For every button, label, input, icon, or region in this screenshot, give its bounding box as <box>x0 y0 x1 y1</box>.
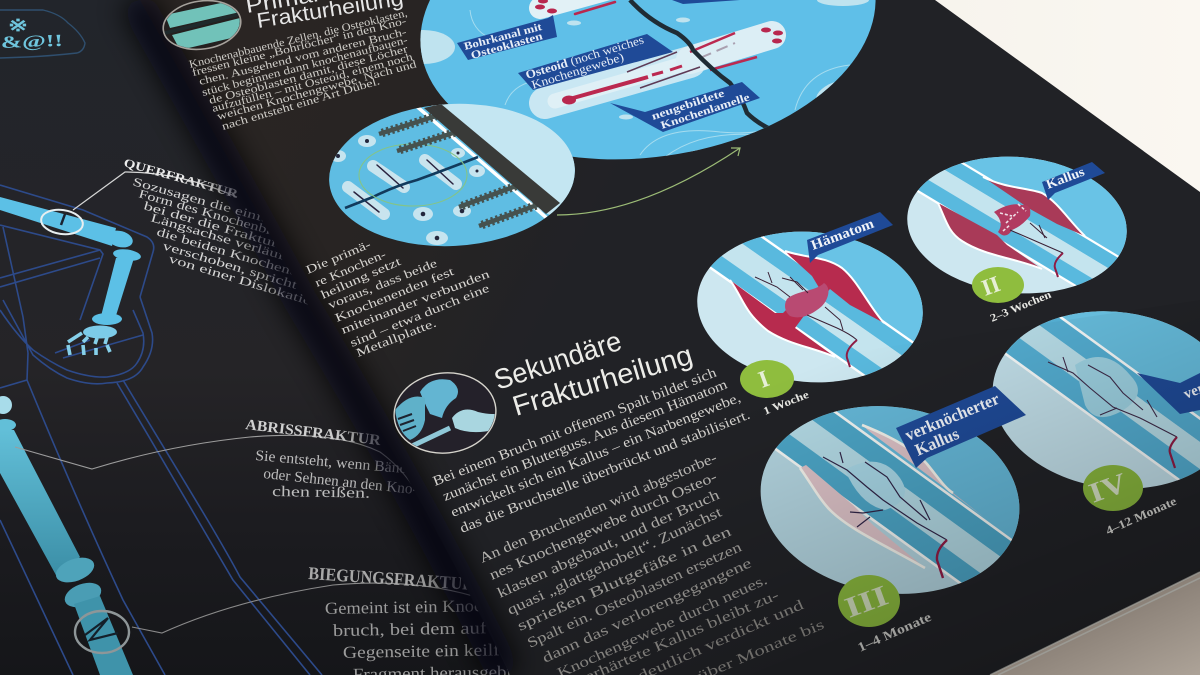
label: Kallus: Kallus <box>1044 164 1086 192</box>
badge: I: I <box>755 366 773 394</box>
callout: Querfraktur: Sozusagen die einfachste <box>131 174 306 236</box>
text block: plate caption <box>304 237 491 360</box>
callout: Abrissfraktur: oder Sehnen an den Kno- <box>263 466 418 498</box>
body outlines <box>0 185 322 675</box>
text block: second paragraph: sprießen Blutgefäße in den <box>515 523 735 635</box>
rings and dots <box>330 135 485 245</box>
badge: III: III <box>840 579 893 625</box>
text block: plate caption: re Knochen- <box>313 247 388 290</box>
text block: primary healing: Knochenabbauende Zellen, die Osteoklasten, <box>188 7 409 71</box>
figure: skeleton illustration <box>0 10 322 675</box>
label: Osteoid: Knochengewebe) <box>530 50 625 92</box>
fracture crack <box>628 0 769 128</box>
diagram: stage III <box>760 386 1026 652</box>
label: neugebildete Knochenlamelle <box>610 82 760 132</box>
text block: second paragraph: klasten abgebaut, und der Bruch <box>495 487 723 602</box>
callus red shapes <box>988 180 1083 236</box>
callout: Abrissfraktur: chen reißen. <box>272 484 370 502</box>
callout: Biegungsfraktur: Gegenseite ein keilförmiges <box>343 639 563 662</box>
text block: primary healing: chen. Ausgehend vom anderen Bruch- <box>198 26 408 88</box>
caption: 1 Woche: 1 Woche <box>762 389 811 418</box>
text block: primary healing: fressen kleine „Bohrlöcher“ in den Kno- <box>191 15 408 79</box>
label: verknöcherter Kallus: verknöcherter <box>902 389 1002 445</box>
background: table shadow area <box>980 565 1200 675</box>
heading: Sekundäre Frakturheilung: Sekundäre <box>490 325 625 396</box>
illustration: bone remodelling circle <box>420 0 876 160</box>
text block: intro paragraph: zunächst ein Bluterguss. Aus diesem Hämatom <box>441 377 730 505</box>
fracture mark: wedge <box>75 611 129 653</box>
red lamella lines <box>566 33 757 100</box>
label: verknöcherter Kallus: Kallus <box>912 424 962 460</box>
page edge stack <box>990 572 1200 675</box>
green zoom circle <box>359 144 467 206</box>
callout: Querfraktur: verschoben, spricht man <box>161 238 333 302</box>
badge: I <box>740 360 794 398</box>
text block: primary healing: nach entsteht eine Art Dübel. <box>220 75 382 133</box>
diagram: stage II Kallus <box>907 156 1127 322</box>
badge: IV: IV <box>1085 467 1131 510</box>
text block: intro paragraph: Bei einem Bruch mit offenem Spalt bildet sich <box>431 366 719 490</box>
label: Bohrkanal: Osteoklasten <box>470 30 544 62</box>
hematoma red shapes <box>785 251 884 323</box>
label: neugebildete Knochenlamelle: neugebildete <box>650 87 726 123</box>
badge: II: II <box>978 271 1004 301</box>
text block: second paragraph: Spalt ein. Osteoblasten ersetzen <box>525 539 745 652</box>
text block: primary healing: stück beginnen dann knochenaufbauen- <box>201 34 409 99</box>
callus fragments <box>994 204 1030 236</box>
text block: primary healing <box>188 7 418 133</box>
bone bridge patch <box>845 462 905 510</box>
callout: Querfraktur <box>73 155 333 312</box>
vessels <box>1048 357 1177 468</box>
callout: Querfraktur: bei der die Frakturlinie <box>142 198 311 259</box>
badge: IV <box>1083 465 1143 511</box>
callout: Abrissfraktur: Sie entsteht, wenn Bänder <box>255 448 420 478</box>
label: Kallus <box>1042 162 1105 200</box>
text block: primary healing: de Osteoblasten damit, diese Löcher <box>208 43 409 107</box>
text block: plate caption: miteinander verbunden <box>339 267 491 337</box>
label: top cut-off flag <box>672 0 740 4</box>
diagram: stage IV <box>992 311 1200 534</box>
speech bubble with lettering: ※ <box>8 16 28 35</box>
badge: II <box>972 267 1024 303</box>
metal plate <box>424 104 560 214</box>
speech bubble with lettering: &@!! <box>0 31 63 52</box>
vessels <box>823 452 947 578</box>
heading: Sekundäre Frakturheilung: Frakturheilung <box>509 339 696 422</box>
caption: 4–12 Monate: 4–12 Monate <box>1103 493 1179 538</box>
label: Osteoid <box>518 32 673 92</box>
caption: 1–4 Monate: 1–4 Monate <box>855 609 934 655</box>
callout: Querfraktur: von einer Dislokation. <box>167 251 327 312</box>
badge: III <box>838 575 900 627</box>
bony callus bulges <box>862 425 985 518</box>
text block: plate caption: Knochenenden fest <box>333 264 457 325</box>
text block: second paragraph: An den Bruchenden wird abgestorbe- <box>477 450 720 567</box>
arrow: plate to detail circle <box>557 148 740 215</box>
label: Osteoid: Osteoid (noch weiches <box>524 32 646 82</box>
pale lumps and specks <box>420 0 869 152</box>
label: Hämatom <box>807 212 893 263</box>
callout: Querfraktur: Form des Knochenbruchs, <box>137 186 306 247</box>
diagram: stage I Hämatom <box>697 212 923 415</box>
label: Hämatom: Hämatom <box>809 217 877 254</box>
text block: plate caption: heilung setzt <box>319 254 404 302</box>
speech bubble with lettering <box>0 10 85 58</box>
callout: Querfraktur: QUERFRAKTUR <box>122 155 240 201</box>
callout: Biegungsfraktur: Gemeint ist ein Knochen- <box>325 596 515 618</box>
text block: plate caption: sind – etwa durch eine <box>348 281 491 350</box>
text block: plate caption: Die primä- <box>304 237 373 277</box>
osteon capsules <box>348 160 456 214</box>
bone: upper arm <box>0 197 135 250</box>
icon: primary healing <box>162 0 242 50</box>
panel: left magazine page <box>0 0 563 675</box>
text block: primary healing: weichen Knochengewebe. Nach und <box>216 58 418 123</box>
callout: Abrissfraktur <box>15 417 423 502</box>
callout: Biegungsfraktur: bruch, bei dem auf der <box>333 618 518 640</box>
text block: second paragraph <box>477 450 827 675</box>
label: verknöcherter (cut off) <box>1137 353 1200 414</box>
text block: primary healing: aufzufüllen – mit Osteoid, einem noch <box>211 51 415 115</box>
screws <box>379 116 540 226</box>
callout: Querfraktur: die beiden Knochenenden <box>155 224 332 289</box>
callout: Querfraktur: Längsachse verläuft. Sind <box>149 210 331 275</box>
fracture mark: transverse <box>40 207 84 237</box>
fracture gap <box>345 157 478 208</box>
label: Bohrkanal: Bohrkanal mit <box>463 21 544 53</box>
lower osteon <box>545 62 690 103</box>
bone: forearm <box>92 248 142 325</box>
label: Bohrkanal <box>457 15 557 62</box>
label: neugebildete Knochenlamelle: Knochenlamelle <box>659 91 751 132</box>
text block: second paragraph: quasi „glattgehobelt“. Zunächst <box>505 504 725 619</box>
caption: 2–3 Wochen: 2–3 Wochen <box>989 289 1053 325</box>
vessels <box>1010 223 1063 277</box>
text block: intro paragraph: entwickelt sich ein Kallus – ein Narbengewebe, <box>449 391 743 521</box>
callout: Biegungsfraktur: BIEGUNGSFRAKTUR <box>308 563 476 594</box>
blood vessels <box>755 272 857 367</box>
text block: second paragraph: nes Knochengewebe durch Osteo- <box>487 469 720 584</box>
text block: intro paragraph <box>431 366 752 537</box>
label: verknöcherter Kallus <box>896 386 1026 468</box>
text block: second paragraph: dann das verlorengegangene <box>540 555 754 667</box>
bone: hand <box>68 326 117 355</box>
illustration: metal plate circle <box>329 104 575 246</box>
text block: plate caption: Metallplatte. <box>354 316 438 360</box>
upper osteon <box>540 0 772 60</box>
callout: Abrissfraktur: ABRISSFRAKTUR <box>245 417 382 449</box>
text block: plate caption: voraus, dass beide <box>326 256 439 312</box>
text block: intro paragraph: das die Bruchstelle überbrückt und stabilisiert. <box>458 408 752 537</box>
bone: leg <box>0 396 133 675</box>
icon: pelvis <box>393 372 497 454</box>
remodelled bone patch <box>1075 357 1138 417</box>
callout: Biegungsfraktur <box>132 563 563 675</box>
